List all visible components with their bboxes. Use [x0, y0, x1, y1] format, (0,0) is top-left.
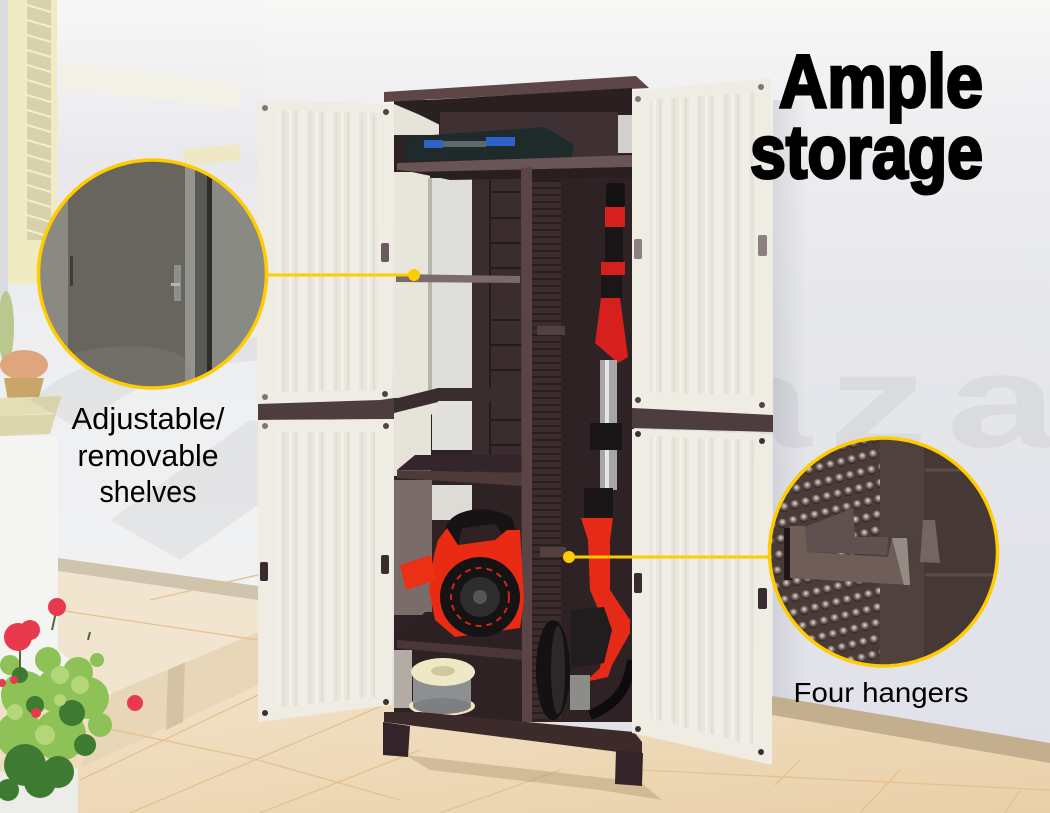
cabinet interior: [394, 100, 634, 722]
central divider: [521, 167, 566, 722]
label line: removable: removable: [78, 438, 218, 473]
base and feet: [383, 712, 643, 786]
left compartment back panels: [390, 104, 522, 708]
label: adjustable shelves: Adjustable/: [72, 401, 225, 436]
connector line right: [563, 551, 770, 563]
watermark logo: laza: [638, 327, 1050, 475]
cabinet: [257, 76, 773, 786]
left middle band: [258, 398, 394, 420]
right lower door: [632, 429, 772, 765]
adjustable shelf: [396, 274, 520, 283]
title: Ample: [779, 39, 983, 123]
window shutter and plant shelf: [0, 0, 62, 676]
callout: four hangers: [563, 437, 1004, 708]
plant: geraniums in pot: [0, 598, 143, 813]
wire spool: [409, 658, 475, 716]
left upper door: [257, 100, 394, 404]
zoom circle: shelf bracket: [38, 160, 272, 395]
left lower door: [258, 419, 394, 722]
toolbox: [404, 127, 574, 161]
lower shelf 1: [397, 455, 522, 486]
watermark logo: [30, 327, 1050, 560]
right upper door: [632, 78, 773, 415]
leaf blower: [400, 509, 524, 637]
title: storage: [750, 110, 983, 194]
connector line left: [266, 269, 420, 281]
label: four hangers: Four hangers: [794, 677, 968, 708]
title: [750, 39, 983, 194]
right middle band: [632, 408, 773, 432]
zoom circle: hanger: [768, 437, 1004, 669]
top shelf: [397, 155, 632, 172]
red power tool: [536, 183, 632, 720]
lower shelf 2: [397, 612, 522, 660]
label line: shelves: shelves: [100, 474, 196, 509]
callout: adjustable shelves: [38, 160, 420, 436]
roof: [384, 76, 649, 102]
